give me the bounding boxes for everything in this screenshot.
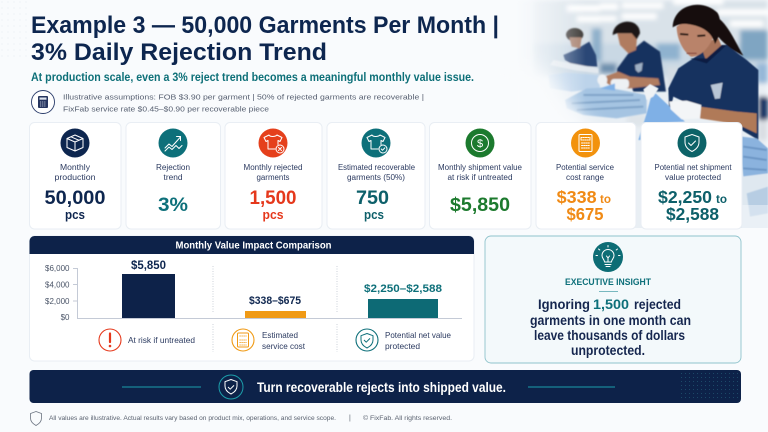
assumptions block: Illustrative assumptions: FOB $3.90 per garment | 50% of rejected garments are recoverable | xyxy=(63,92,424,102)
icon: recovered shirt xyxy=(362,128,390,158)
panel: monthly value impact comparison xyxy=(30,236,474,361)
icon: calculator xyxy=(32,90,54,114)
panel: executive insight: EXECUTIVE INSIGHT xyxy=(565,277,652,287)
card: estimated recoverable garments xyxy=(327,122,425,229)
card: estimated recoverable garments: garments (50%) xyxy=(347,173,405,182)
card: estimated recoverable garments: pcs xyxy=(364,208,384,222)
insight statement: unprotected. xyxy=(571,342,645,358)
legend: net value xyxy=(356,329,451,351)
bar: at risk: $5,850 xyxy=(131,260,166,272)
card: estimated recoverable garments: 750 xyxy=(356,187,389,209)
call-to-action banner: Turn recoverable rejects into shipped value. xyxy=(257,380,506,395)
card: potential net shipment value protected: $2,588 xyxy=(666,204,719,224)
card: potential net shipment value protected xyxy=(641,122,742,229)
y-axis labels: $6,000 xyxy=(45,264,70,273)
photo: garment workers inspecting shirts xyxy=(534,0,768,228)
footer note xyxy=(30,412,452,426)
table garments xyxy=(565,87,647,118)
assumptions block xyxy=(32,90,424,114)
card: monthly shipment value at risk xyxy=(430,122,531,229)
icon: shield check xyxy=(219,375,243,399)
chart header: Monthly Value Impact Comparison xyxy=(176,240,332,252)
legend: net value: Potential net value xyxy=(385,330,451,340)
title: Example 3 — 50,000 Garments Per Month | xyxy=(31,12,499,39)
legend: at risk xyxy=(99,329,195,351)
title xyxy=(31,12,499,66)
insight statement: garments in one month can xyxy=(530,312,691,328)
insight statement xyxy=(530,296,691,358)
woman worker xyxy=(668,45,758,140)
icon: box xyxy=(60,128,90,158)
icon: trend arrow xyxy=(158,128,188,158)
bar chart xyxy=(45,260,462,352)
icon: footer shield xyxy=(30,412,42,426)
right garment stack xyxy=(742,137,768,177)
call-to-action banner xyxy=(30,370,741,403)
legend: at risk: At risk if untreated xyxy=(128,335,195,345)
panel: executive insight xyxy=(485,236,741,363)
icon: rejected shirt xyxy=(258,128,288,158)
icon: calculator xyxy=(571,128,600,158)
bar: service cost: $338–$675 xyxy=(249,295,301,307)
bar: net value xyxy=(364,283,442,318)
card: monthly rejected garments: Monthly rejected xyxy=(244,163,302,172)
y-axis labels xyxy=(45,264,70,322)
card: monthly rejected garments: pcs xyxy=(262,208,284,222)
card: rejection trend xyxy=(126,122,220,229)
card: monthly rejected garments: 1,500 xyxy=(250,187,297,209)
insight statement: Ignoring xyxy=(538,296,590,312)
subtitle: At production scale, even a 3% reject trend becomes a meaningful monthly value issue. xyxy=(31,72,474,84)
card: potential service cost range: cost range xyxy=(566,173,605,182)
card: potential service cost range: $675 xyxy=(566,204,604,224)
card: potential service cost range: to xyxy=(600,194,611,206)
icon: shield check xyxy=(678,128,706,158)
assumptions block: FixFab service rate $0.45–$0.90 per recoverable piece xyxy=(63,104,269,114)
middle worker xyxy=(617,41,666,92)
far worker xyxy=(563,42,597,67)
card: monthly production xyxy=(30,122,121,229)
insight statement: leave thousands of dollars xyxy=(534,327,685,343)
footer note: All values are illustrative. Actual results vary based on product mix, operations, and service scope. xyxy=(49,415,336,422)
card: rejection trend: Rejection xyxy=(156,163,190,172)
chart header xyxy=(30,236,474,254)
footer note: © FixFab. All rights reserved. xyxy=(363,414,452,422)
card: rejection trend: 3% xyxy=(158,194,188,216)
card: potential service cost range xyxy=(536,122,636,229)
insight statement: rejected xyxy=(634,296,681,312)
photo fade to page colour xyxy=(500,60,600,240)
insight statement: 1,500 xyxy=(593,296,629,312)
card: potential net shipment value protected: value protected xyxy=(665,173,721,182)
card: rejection trend: trend xyxy=(164,173,182,182)
footer note: | xyxy=(349,415,351,422)
bar: at risk xyxy=(122,260,175,318)
bar: service cost xyxy=(245,295,306,318)
card: potential service cost range: Potential service xyxy=(556,163,615,172)
card: monthly production: 50,000 xyxy=(44,187,106,209)
icon: light bulb xyxy=(593,242,623,272)
bar: net value: $2,250–$2,588 xyxy=(364,283,442,295)
card: monthly shipment value at risk: at risk if untreated xyxy=(448,173,512,182)
legend: service cost xyxy=(232,329,306,351)
legend: service cost: service cost xyxy=(262,341,306,351)
card: potential net shipment value protected: Potential net shipment xyxy=(654,163,732,172)
y-axis labels: $4,000 xyxy=(45,280,70,290)
y-axis labels: $0 xyxy=(61,313,70,322)
y-axis labels: $2,000 xyxy=(45,297,70,306)
legend: service cost: Estimated xyxy=(262,330,298,340)
card: potential service cost range: $338 xyxy=(557,187,597,207)
card: monthly shipment value at risk: $5,850 xyxy=(450,194,510,216)
card: monthly rejected garments: garments xyxy=(256,173,290,182)
card: monthly production: Monthly xyxy=(60,163,90,172)
legend: net value: protected xyxy=(385,341,420,351)
card: monthly rejected garments xyxy=(225,122,322,229)
card: potential net shipment value protected: $2,250 xyxy=(658,187,712,207)
icon: dollar coin: $ xyxy=(477,138,483,150)
card: monthly shipment value at risk: Monthly shipment value xyxy=(438,163,523,172)
card: estimated recoverable garments: Estimated recoverable xyxy=(338,163,416,172)
card: potential net shipment value protected: to xyxy=(716,194,727,206)
card: monthly production: pcs xyxy=(65,208,85,222)
title: 3% Daily Rejection Trend xyxy=(31,39,327,66)
card: monthly production: production xyxy=(54,173,96,182)
